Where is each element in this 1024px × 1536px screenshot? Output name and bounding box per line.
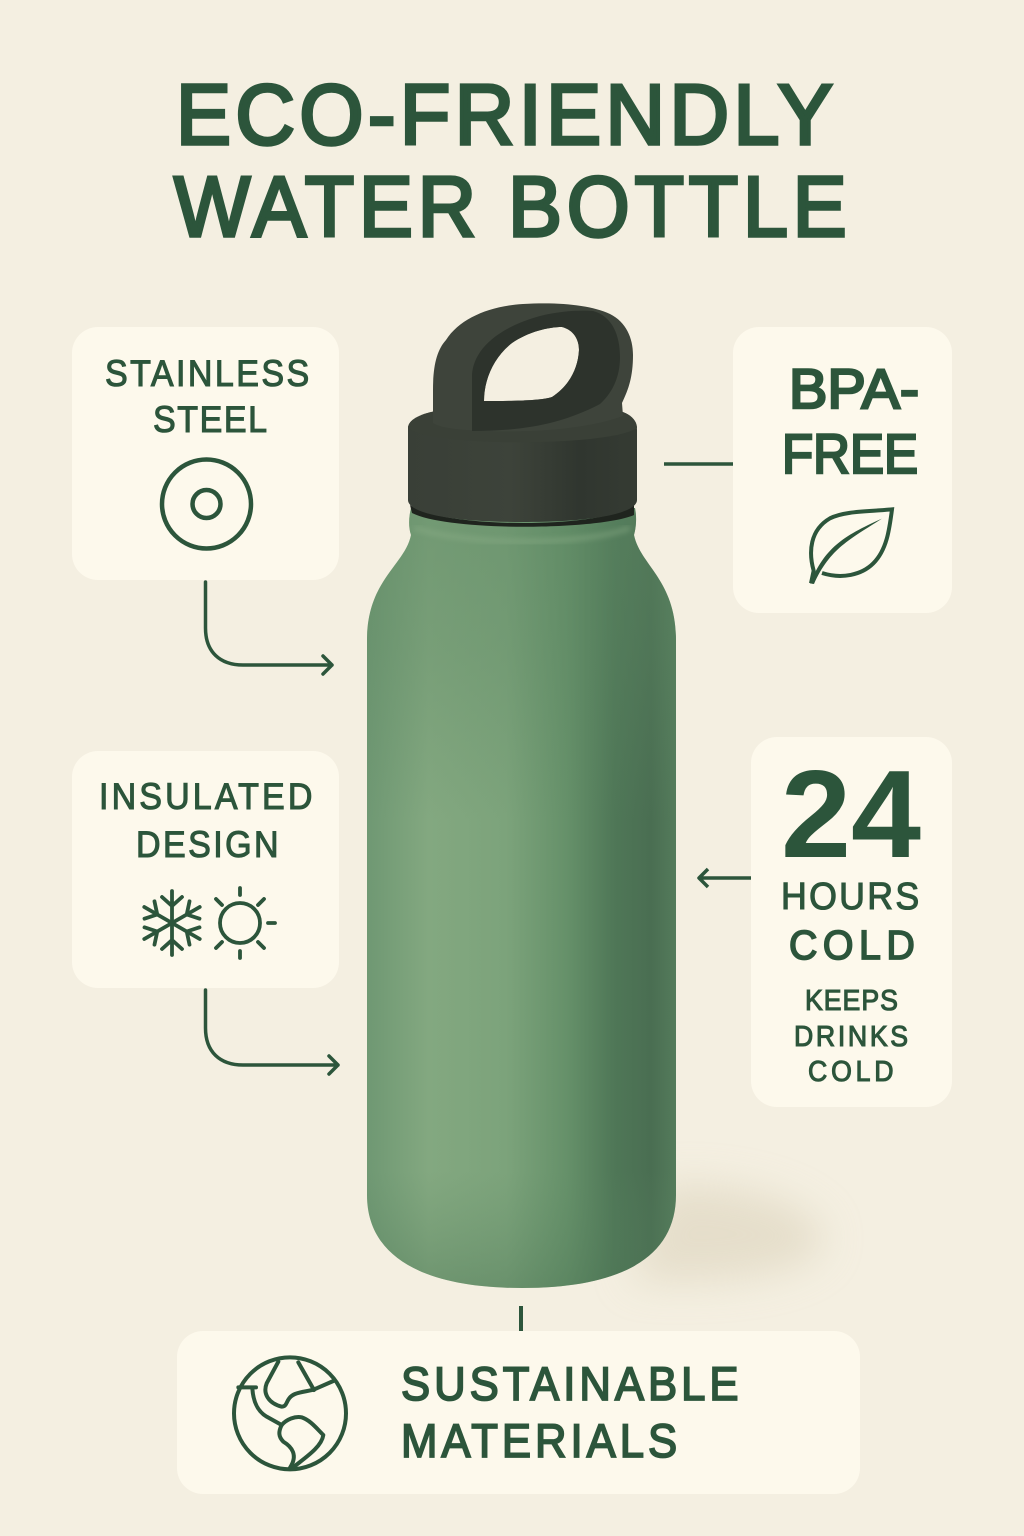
text: keeps drinks cold: DRINKS: [794, 1020, 908, 1052]
neck highlight: [414, 528, 630, 542]
cap: [408, 303, 637, 527]
arrow: insulated design to bottle: [206, 990, 338, 1074]
label: insulated design: DESIGN: [136, 824, 279, 865]
arrow: 24 hours cold to bottle: [699, 869, 751, 887]
panel: sustainable materials: [177, 1331, 860, 1494]
connector: bpa-free to cap: [664, 462, 733, 466]
label: stainless steel: STEEL: [153, 399, 267, 440]
icon: globe: [234, 1357, 346, 1469]
icon: snowflake: [139, 891, 205, 955]
cap top rim: [408, 411, 637, 442]
label: sustainable materials: MATERIALS: [401, 1415, 677, 1467]
title: [174, 67, 847, 254]
label: insulated design: INSULATED: [99, 776, 312, 817]
icon: sun: [216, 888, 275, 958]
text: keeps drinks cold: [794, 984, 908, 1087]
label: stainless steel: STAINLESS: [105, 353, 309, 394]
label: bpa-free: [782, 357, 919, 485]
arrow: stainless steel to bottle: [206, 582, 332, 674]
handle: [433, 303, 633, 431]
cap gasket: [410, 505, 634, 527]
bottle shadow: [630, 1184, 825, 1281]
label: hours cold: HOURS: [781, 875, 919, 917]
water bottle: [367, 303, 676, 1288]
handle inner surface: [472, 311, 620, 431]
panel: insulated design: [72, 751, 339, 988]
label: sustainable materials: SUSTAINABLE: [401, 1358, 739, 1410]
icon: leaf: [810, 509, 892, 584]
panel: 24 hours cold: [751, 737, 952, 1107]
cap side: [408, 411, 637, 522]
label: insulated design: [99, 776, 312, 865]
text: keeps drinks cold: KEEPS: [805, 984, 898, 1016]
label: sustainable materials: [401, 1358, 739, 1467]
label: bpa-free: FREE: [782, 422, 918, 485]
connector: bottle to sustainable materials: [519, 1306, 523, 1331]
stat: 24: 24: [781, 746, 921, 884]
icon: steel disc: [162, 460, 251, 548]
label: hours cold: [781, 875, 919, 968]
title: WATER BOTTLE: [174, 159, 847, 254]
panel: stainless steel: [72, 327, 339, 580]
panel: bpa-free: [733, 327, 952, 613]
label: bpa-free: BPA-: [789, 357, 919, 420]
text: keeps drinks cold: COLD: [808, 1055, 894, 1087]
bottle body: [367, 508, 676, 1288]
label: stainless steel: [105, 353, 309, 440]
title: ECO-FRIENDLY: [176, 67, 833, 162]
label: hours cold: COLD: [789, 922, 915, 968]
